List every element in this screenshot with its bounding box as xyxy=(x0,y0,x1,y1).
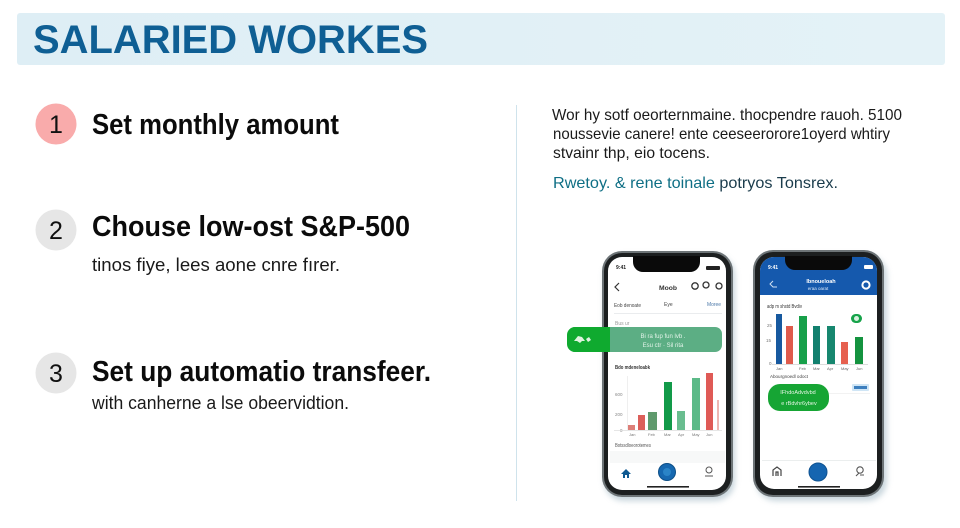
explanatory paragraph: Wor hy sotf oeorternmaine. thocpendre rauoh. 5100 xyxy=(552,107,902,124)
bar chart: Jan xyxy=(629,432,635,437)
bar chart xyxy=(614,373,722,437)
bar chart: May xyxy=(692,432,700,437)
bar chart: Apr xyxy=(678,432,685,437)
green transfer banner: Bi ra fup fun lvb . xyxy=(640,334,686,340)
step 3 number badge: 3 xyxy=(49,360,63,388)
chart title: adp m shstd Bvdiv xyxy=(767,304,802,310)
status bar xyxy=(616,265,720,271)
list label: Abourgnoedl odoct xyxy=(770,374,809,380)
small blue tag xyxy=(852,384,869,391)
tab row: Moree xyxy=(707,302,721,308)
bar chart: Mar xyxy=(664,432,672,437)
profile icon xyxy=(705,467,713,476)
green message pill: e rBdvhr6ybev xyxy=(781,401,817,407)
highlighted note: Rwetoy. & rene toinale potryos Tonsrex. xyxy=(553,175,838,192)
step 3 heading: Set up automatio transfeer. xyxy=(92,356,431,388)
tab row: Bus ur xyxy=(615,321,630,327)
title band xyxy=(17,13,945,65)
blue app header: Ibnoueloah xyxy=(806,279,836,285)
step 2 number badge: 2 xyxy=(49,217,63,245)
explanatory paragraph xyxy=(552,107,902,162)
bar chart: Feb xyxy=(799,366,807,371)
step 1 xyxy=(36,104,339,144)
tab row xyxy=(614,302,722,327)
bar chart: 15 xyxy=(766,338,772,343)
step 1 number badge xyxy=(36,104,76,144)
bar chart: 25 xyxy=(767,323,773,328)
bar chart: May xyxy=(841,366,849,371)
bar chart: Jan xyxy=(776,366,782,371)
bar chart: Apr xyxy=(827,366,834,371)
bar chart: Feb xyxy=(648,432,656,437)
chart title: Bdo mdeneloabk xyxy=(615,365,650,371)
step 3 xyxy=(36,352,431,413)
phone right xyxy=(753,250,887,501)
centre action button xyxy=(809,463,827,481)
bar chart: Mar xyxy=(813,366,821,371)
bar chart: Jun xyxy=(706,432,712,437)
blue app header xyxy=(760,256,877,295)
step 2 number badge xyxy=(36,210,76,250)
title: SALARIED WORKES xyxy=(33,18,428,62)
bar chart: Jun xyxy=(856,366,862,371)
home icon xyxy=(621,469,631,478)
blue app header: eraa oarat xyxy=(808,286,829,291)
app navigation bar xyxy=(615,282,722,292)
green transfer banner xyxy=(567,327,722,352)
blue app header: 9:41 xyxy=(768,265,778,271)
centre action button xyxy=(658,464,676,480)
explanatory paragraph: stvainr thp, eio tocens. xyxy=(553,145,710,162)
bar chart: 0 xyxy=(769,361,772,366)
home icon xyxy=(773,467,781,476)
bar chart xyxy=(766,314,868,371)
step 2 description: tinos fiye, lees aone cnre fırer. xyxy=(92,255,340,275)
tab row: Eob denoate xyxy=(614,303,641,309)
section label: Botssdloeorotemes xyxy=(615,443,651,449)
bar chart: 200 xyxy=(615,412,623,417)
step 2 heading: Chouse low-ost S&P-500 xyxy=(92,211,410,243)
bar chart: 600 xyxy=(615,392,623,397)
step 1 number badge: 1 xyxy=(49,111,63,139)
step 3 number badge xyxy=(36,352,76,394)
green status badge xyxy=(851,314,862,323)
profile icon xyxy=(856,467,864,476)
green message pill xyxy=(768,384,829,411)
step 3 description: with canherne a lse obeervidtion. xyxy=(91,393,349,413)
green message pill: IFhdoAdvdvbd xyxy=(780,390,816,396)
green transfer banner: Esu ctr · Sil rita xyxy=(643,343,684,349)
step 2 xyxy=(36,210,410,275)
explanatory paragraph: noussevie canere! ente ceeseerorore1oyerd whtiry xyxy=(553,126,890,143)
app navigation bar: Moob xyxy=(659,285,677,292)
step 1 heading: Set monthly amount xyxy=(92,109,339,141)
phone left xyxy=(567,251,735,501)
bar chart: 0 xyxy=(620,428,623,433)
status bar: 9:41 xyxy=(616,265,626,271)
tab row: Eye xyxy=(664,302,673,308)
